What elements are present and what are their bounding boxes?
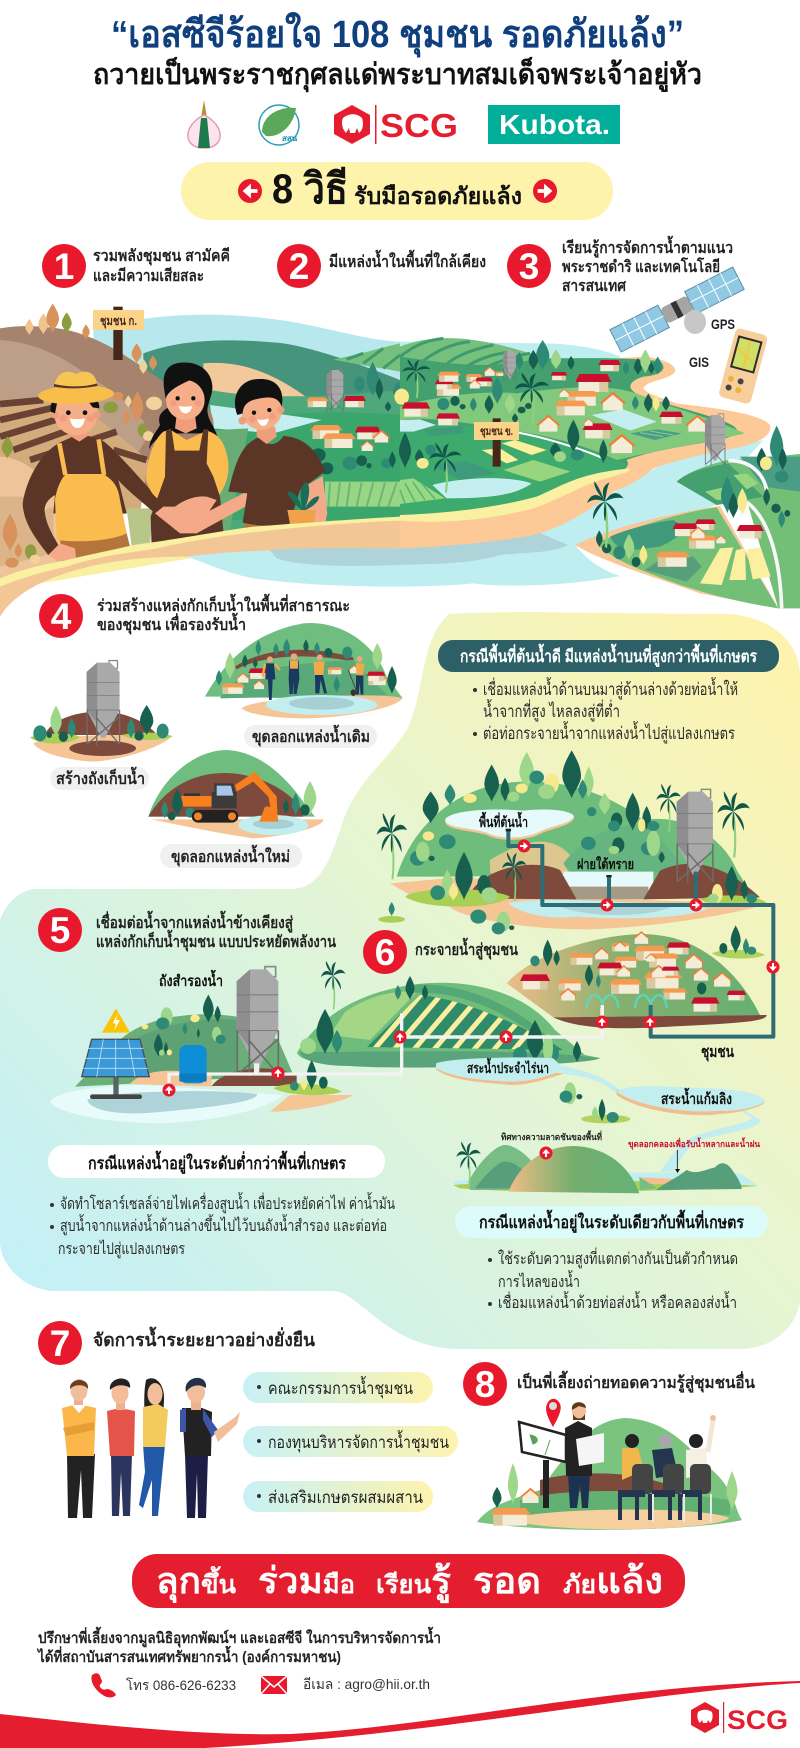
sign: community A [93,310,144,330]
icon: location pin [546,1399,561,1427]
label: dredge new [160,844,302,868]
banner: slogan: ร่วมมือ [258,1560,355,1601]
banner: slogan: เรียนรู้ [376,1560,452,1604]
logo: SCG [334,105,458,144]
illustration: build water tank [30,661,173,762]
landscape illustration [0,304,800,617]
label: sand weir: ฝายใต้ทราย [577,855,634,872]
step 3: พระราชดำริ และเทคโนโลยี [562,256,720,276]
icon: mail [261,1676,287,1694]
title: “เอสซีจีร้อยใจ 108 ชุมชน รอดภัยแล้ง” [111,12,684,58]
step 3: 3 [519,246,539,287]
icon: GIS handheld [689,327,768,405]
text: same level bullets: ใช้ระดับความสูงที่แตกต่างกันเป็นตัวกำหนด [498,1247,738,1269]
icon: blue pressure tank [179,1045,207,1083]
heading pill: 8 ways [181,162,613,220]
step 6: กระจายน้ำสู่ชุมชน [415,937,518,961]
step 5: เชื่อมต่อน้ำจากแหล่งน้ำข้างเคียงสู่ [96,910,293,934]
icon: GIS handheld: GIS [689,354,709,370]
banner: slogan: ลุกขึ้น [156,1560,236,1604]
village on hill [507,925,767,1028]
ponds and canal [436,1057,765,1193]
sign: community B: ชุมชน ข. [480,426,513,439]
text: upland source bullets: น้ำจากที่สูง ไหลลงสู่ที่ต่ำ [483,699,620,722]
step 6 [363,930,518,974]
label: dredge existing: ขุดลอกแหล่งน้ำเดิม [252,724,370,747]
pill: water fund: กองทุนบริหารจัดการน้ำชุมชน [268,1430,449,1453]
diagram: farmland hill with stripes [297,961,600,1068]
step 6: 6 [375,932,395,973]
heading: upland source case [438,640,779,672]
left half of landscape with farmers [0,304,404,617]
panel: gradient background for methods 5 and 6 [0,612,800,1349]
label: farm pond: สระน้ำประจำไร่นา [467,1057,549,1076]
label: community: ชุมชน [701,1044,734,1062]
pill: water committee: คณะกรรมการน้ำชุมชน [268,1376,413,1399]
teal water pipes [508,830,773,1037]
step 4: ของชุมชน เพื่อรองรับน้ำ [97,612,246,635]
sign: community B [474,422,519,440]
icon: phone [91,1673,116,1697]
banner: slogan [132,1554,685,1608]
step 1: 1 [54,246,74,287]
label: watershed: พื้นที่ต้นน้ำ [479,811,528,830]
logo: Kubota [488,105,620,144]
banner: slogan: รอด [473,1560,541,1601]
person 1 [62,1379,96,1518]
banner: slogan: ภัยแล้ง [563,1560,663,1601]
red swoosh [0,1681,800,1748]
step 4: ร่วมสร้างแหล่งกักเก็บน้ำในพื้นที่สาธารณะ [97,593,350,615]
illustration: dredge new source with excavator [148,750,323,838]
diagram: upland watershed, weir and village [377,750,773,1037]
flow markers [162,840,780,1160]
step 2 [277,244,486,288]
step 7 [38,1321,316,1365]
step 5: แหล่งกักเก็บน้ำชุมชน แบบประหยัดพลังงาน [96,929,336,952]
label: canal dredge: ขุดลอกคลองเพื่อรับน้ำหลากและน้ำฝน [628,1137,761,1150]
heading: lower source case [48,1145,385,1178]
pills: long-term management [243,1372,458,1512]
label: monkey cheek pond: สระน้ำแก้มลิง [661,1087,732,1108]
text: same level bullets [488,1247,738,1312]
heading: same level case: กรณีแหล่งน้ำอยู่ในระดับเดียวกับพื้นที่เกษตร [479,1209,745,1234]
label: slope direction: ทิศทางความลาดชันของพื้นที่ [501,1130,602,1142]
pill: mixed farming [243,1481,433,1512]
step 2: 2 [289,246,309,287]
text: phone: โทร 086-626-6233 [126,1677,236,1693]
step 4 [39,593,350,638]
logos [188,100,620,148]
yellow and sand shore [0,517,400,617]
subtitle: ถวายเป็นพระราชกุศลแด่พระบาทสมเด็จพระเจ้าอยู่หัว [93,56,702,92]
audience with chairs [618,1415,716,1522]
person: presenter [565,1402,604,1508]
icon: map board [519,1422,566,1508]
illustration: four community members [62,1378,240,1518]
text: same level bullets: การไหลของน้ำ [498,1270,580,1291]
footer text [36,1626,441,1666]
footer text: ได้ที่สถาบันสารสนเทศทรัพยากรน้ำ (องค์การมหาชน) [36,1645,341,1666]
pill: mixed farming: ส่งเสริมเกษตรผสมผสาน [268,1488,423,1507]
icon: warning [102,1008,130,1033]
text: upland source bullets [473,677,738,744]
step 7: 7 [50,1323,70,1364]
sprinklers [587,995,667,1008]
icon: solar panel [82,1039,149,1099]
illustration: knowledge sharing meeting [477,1399,742,1530]
step 4: 4 [51,596,72,637]
step 1 [42,244,230,288]
step 1: และมีความเสียสละ [93,266,204,285]
person 2 [107,1378,135,1516]
heading pill: 8 ways: รับมือรอดภัยแล้ง [354,183,522,209]
right half of landscape with villages [394,338,800,608]
logo: SCG footer [691,1702,788,1735]
step 1: รวมพลังชุมชน สามัคคี [93,246,230,266]
heading: lower source case: กรณีแหล่งน้ำอยู่ในระดับต่ำกว่าพื้นที่เกษตร [88,1150,347,1175]
pill: water committee [243,1372,433,1403]
diagram: solar pump and reserve tank [50,967,402,1123]
pill: water fund [243,1426,458,1457]
icon: GPS satellite: GPS [711,316,735,332]
step 3 [507,235,733,295]
step 8 [463,1362,755,1406]
illustration: dredge existing source with workers [205,623,403,718]
step 5: 5 [50,910,70,951]
island: slope hills [453,1142,758,1193]
step 2: มีแหล่งน้ำในพื้นที่ใกล้เคียง [329,249,486,271]
logo: leaf [259,105,299,145]
logo: SCG footer: SCG [727,1705,788,1735]
label: reserve tank: ถังสำรองน้ำ [159,969,223,990]
person: young man with plant [192,379,327,534]
text: same level bullets: เชื่อมแหล่งน้ำด้วยท่อส่งน้ำ หรือคลองส่งน้ำ [498,1291,737,1312]
text: lower source bullets: สูบน้ำจากแหล่งน้ำด้านล่างขึ้นไปไว้บนถังน้ำสำรอง และต่อท่อ [60,1214,387,1236]
person 3 [139,1378,168,1516]
step 7: จัดการน้ำระยะยาวอย่างยั่งยืน [93,1326,316,1350]
person: woman [146,363,228,548]
icon: right arrow [533,179,557,203]
step 3: สารสนเทศ [562,278,627,295]
label: dredge existing [244,724,377,748]
logo: SCG: SCG [380,107,458,144]
illustrations for step 4 [30,623,403,838]
step 8: 8 [475,1364,495,1405]
heading: same level case [455,1206,768,1238]
text: lower source bullets: กระจายไปสู่แปลงเกษตร [58,1239,185,1259]
icon: left arrow [238,179,262,203]
text: lower source bullets [50,1192,395,1259]
step 5 [38,908,336,952]
icon: GPS satellite [610,267,744,352]
logo: leaf: สสน [282,134,298,143]
person: farmer with hat [23,372,165,567]
logo: Kubota: Kubota. [499,109,610,140]
label: build tank [50,766,149,790]
step 3: เรียนรู้การจัดการน้ำตามแนว [562,235,733,259]
label: dredge new: ขุดลอกแหล่งน้ำใหม่ [171,844,290,867]
sign: community A: ชุมชน ก. [100,314,137,329]
logo: foundation [188,100,220,148]
text: lower source bullets: จัดทำโซลาร์เซลล์จ่ายไฟเครื่องสูบน้ำ เพื่อประหยัดค่าไฟ ค่าน้ำมัน [60,1192,395,1214]
lake and river [400,440,763,587]
person 4 [180,1378,240,1518]
text: email: อีเมล : agro@hii.or.th [303,1676,430,1692]
step 8: เป็นพี่เลี้ยงถ่ายทอดความรู้สู่ชุมชนอื่น [517,1370,755,1394]
footer text: ปรึกษาพี่เลี้ยงจากมูลนิธิอุทกพัฒน์ฯ และเอสซีจี ในการบริหารจัดการน้ำ [38,1626,441,1648]
label: build tank: สร้างถังเก็บน้ำ [56,766,145,788]
heading pill: 8 ways: 8 วิธี [272,165,348,212]
